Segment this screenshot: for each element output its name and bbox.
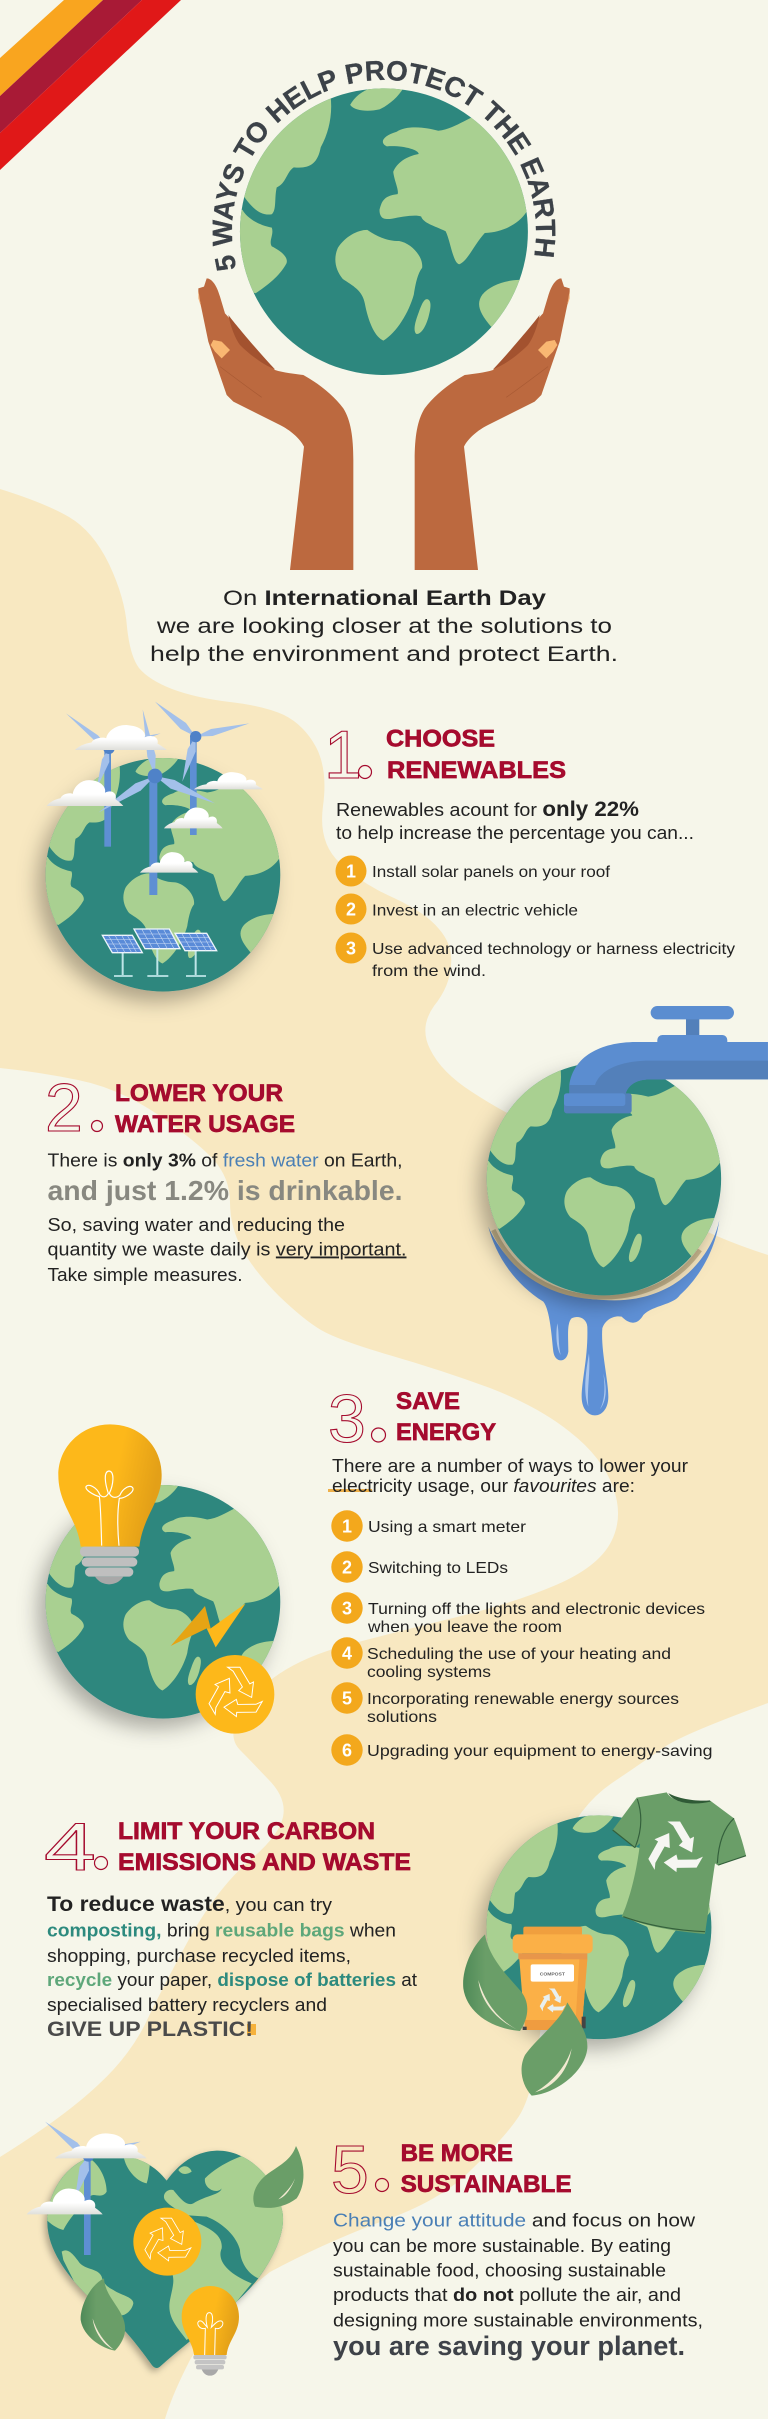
intro text bbox=[150, 587, 618, 666]
heading: SUSTAINABLE bbox=[401, 2171, 572, 2198]
body text: There is only 3% of fresh water on Earth, bbox=[48, 1150, 402, 1170]
list: 1 bbox=[346, 862, 356, 882]
corner stripes bbox=[0, 0, 181, 170]
body text: sustainable food, choosing sustainable bbox=[333, 2260, 666, 2281]
background blob bbox=[0, 489, 768, 2419]
icon: earth heart bbox=[47, 2151, 283, 2368]
body text: To reduce waste , you can try bbox=[47, 1892, 333, 1916]
intro bbox=[336, 798, 694, 843]
body text: quantity we waste daily is very important. bbox=[48, 1238, 406, 1260]
body text: GIVE UP PLASTIC! bbox=[47, 2017, 253, 2041]
list: Turning off the lights and electronic devices bbox=[368, 1601, 705, 1618]
list: Upgrading your equipment to energy-saving bbox=[367, 1743, 712, 1760]
body text: So, saving water and reducing the bbox=[48, 1214, 345, 1235]
icon: solar panels bbox=[102, 929, 217, 976]
list: 3 bbox=[346, 938, 356, 958]
number 1: 1 bbox=[324, 717, 362, 793]
heading bbox=[386, 726, 566, 784]
icon: clouds bbox=[27, 2133, 147, 2214]
number 5 bbox=[331, 2132, 388, 2208]
list bbox=[336, 856, 735, 980]
list: 3 bbox=[342, 1598, 352, 1618]
heading bbox=[118, 1818, 411, 1876]
body text bbox=[47, 1892, 417, 2041]
body text: recycle your paper, dispose of batteries at bbox=[47, 1969, 417, 1990]
main globe bbox=[230, 80, 539, 375]
list: 5 bbox=[342, 1688, 352, 1708]
body text: composting, bring reusable bags when bbox=[47, 1920, 396, 1940]
icon: recycle badge bbox=[133, 2208, 201, 2276]
icon: compost bin: COMPOST bbox=[540, 1971, 565, 1977]
intro: to help increase the percentage you can... bbox=[336, 822, 694, 843]
number 2: 2 bbox=[45, 1070, 83, 1146]
number 4: 4 bbox=[44, 1809, 96, 1885]
panel: 5 heart illustration bbox=[27, 2122, 303, 2376]
icon: wind turbine bbox=[45, 2122, 141, 2255]
icon: lightning bolt bbox=[171, 1603, 246, 1647]
icon: light bulb bbox=[58, 1424, 162, 1584]
heading bbox=[115, 1080, 295, 1138]
heading: LIMIT YOUR CARBON bbox=[118, 1818, 375, 1845]
icon: leaves bbox=[81, 2146, 303, 2351]
panel: 1 choose renewables illustration bbox=[38, 702, 289, 992]
intro bbox=[332, 1456, 688, 1496]
title arc: 5 WAYS TO HELP PROTECT THE EARTH bbox=[212, 60, 556, 271]
list: Scheduling the use of your heating and bbox=[367, 1646, 671, 1663]
body text: shopping, purchase recycled items, bbox=[47, 1945, 351, 1966]
body text: Change your attitude and focus on how bbox=[333, 2210, 696, 2231]
list: 4 bbox=[342, 1644, 352, 1664]
intro: There are a number of ways to lower your bbox=[332, 1456, 688, 1476]
icon: clouds bbox=[47, 725, 263, 873]
panel: 2 water text bbox=[45, 1070, 406, 1285]
panel: 5 sustainable text bbox=[331, 2132, 703, 2361]
body text bbox=[48, 1150, 406, 1285]
panel: 4 waste text bbox=[44, 1809, 417, 2041]
heading: ENERGY bbox=[396, 1419, 496, 1446]
list: Use advanced technology or harness electricity bbox=[372, 941, 735, 958]
heading: CHOOSE bbox=[386, 726, 495, 752]
list: solutions bbox=[367, 1709, 437, 1726]
list: Install solar panels on your roof bbox=[372, 864, 611, 881]
heading: BE MORE bbox=[401, 2140, 513, 2167]
list bbox=[331, 1510, 712, 1766]
panel: 4 waste illustration bbox=[463, 1792, 746, 2096]
orange accent bbox=[328, 1489, 372, 1492]
icon: tap bbox=[564, 1006, 768, 1113]
panel: 1 choose renewables text bbox=[324, 717, 735, 980]
number 2 bbox=[45, 1070, 102, 1146]
body text: Take simple measures. bbox=[48, 1264, 242, 1285]
intro text: we are looking closer at the solutions to bbox=[156, 615, 612, 638]
body text: you can be more sustainable. By eating bbox=[333, 2235, 671, 2256]
body text: products that do not pollute the air, and bbox=[333, 2284, 681, 2305]
heading: WATER USAGE bbox=[115, 1111, 295, 1138]
intro: Renewables acount for only 22% bbox=[336, 798, 639, 821]
icon: t-shirt bbox=[613, 1792, 746, 1934]
heading: EMISSIONS AND WASTE bbox=[118, 1849, 411, 1876]
body text: you are saving your planet. bbox=[333, 2331, 685, 2361]
body text: designing more sustainable environments, bbox=[333, 2310, 703, 2331]
list: from the wind. bbox=[372, 963, 486, 980]
body text: specialised battery recyclers and bbox=[47, 1994, 327, 2015]
list: 2 bbox=[346, 900, 356, 920]
list: 2 bbox=[342, 1558, 352, 1578]
number 3 bbox=[328, 1381, 386, 1457]
intro text: On International Earth Day bbox=[223, 587, 546, 610]
icon: compost bin bbox=[513, 1927, 593, 2030]
icon: hands bbox=[198, 278, 570, 570]
panel: 3 energy illustration bbox=[38, 1424, 289, 1734]
icon: light bulb bbox=[182, 2286, 239, 2376]
heading: SAVE bbox=[396, 1388, 460, 1415]
list: cooling systems bbox=[367, 1664, 491, 1681]
number 3: 3 bbox=[328, 1381, 366, 1457]
list: Using a smart meter bbox=[368, 1519, 527, 1536]
heading bbox=[396, 1388, 496, 1446]
list: Invest in an electric vehicle bbox=[372, 902, 578, 920]
list: 1 bbox=[342, 1516, 352, 1536]
icon: wind turbines bbox=[66, 702, 249, 895]
heading: LOWER YOUR bbox=[115, 1080, 283, 1107]
panel: 3 energy text bbox=[328, 1381, 712, 1766]
list: when you leave the room bbox=[367, 1619, 562, 1636]
list: 6 bbox=[342, 1740, 352, 1760]
icon: water cradle and drips bbox=[488, 1220, 719, 1415]
number 4 bbox=[44, 1809, 108, 1885]
list: Incorporating renewable energy sources bbox=[367, 1691, 679, 1708]
number 5: 5 bbox=[331, 2132, 369, 2208]
heading bbox=[401, 2140, 572, 2198]
intro text: help the environment and protect Earth. bbox=[150, 643, 618, 666]
heading: RENEWABLES bbox=[387, 757, 566, 784]
icon: recycle badge bbox=[196, 1655, 274, 1734]
list: Switching to LEDs bbox=[368, 1560, 508, 1577]
panel: 2 water illustration bbox=[479, 1006, 768, 1415]
icon: leaves bbox=[463, 1934, 587, 2096]
orange accent bbox=[247, 2024, 256, 2035]
body text bbox=[333, 2210, 703, 2361]
body text: and just 1.2% is drinkable. bbox=[48, 1175, 402, 1206]
intro: electricity usage, our favourites are: bbox=[332, 1476, 635, 1496]
